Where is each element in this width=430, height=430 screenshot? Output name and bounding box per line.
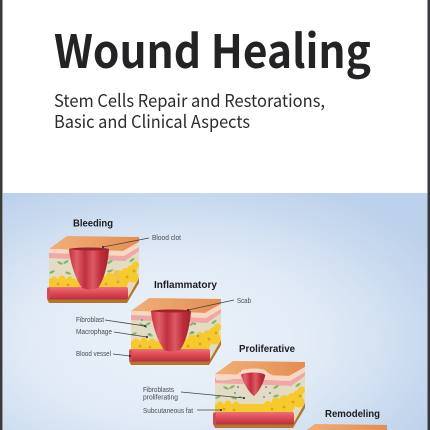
label: Blood vessel: Blood vessel [76,351,111,358]
label: Subcutaneous fat: Subcutaneous fat [143,408,193,415]
label: Macrophage [76,329,148,338]
panel: illustration background [3,193,428,430]
title: Wound Healing [54,16,371,82]
label: Fibroblasts proliferating [143,387,245,402]
label: Fibroblast [76,317,146,327]
subtitle: Basic and Clinical Aspects [54,109,250,134]
heading: Inflammatory: Inflammatory [154,279,217,291]
heading: Bleeding: Bleeding [73,218,113,230]
heading: Proliferative: Proliferative [239,343,295,355]
page edge: right [428,0,430,430]
block: inflammatory [129,298,221,365]
label: Scab: Scab [237,298,251,305]
label: Blood clot: Blood clot [152,235,181,242]
label: Macrophage: Macrophage [76,329,112,336]
label: Blood clot [102,235,181,248]
block: bleeding [47,236,139,303]
label: Fibroblast: Fibroblast [76,317,104,324]
label: Scab [187,298,251,311]
page edge: left [0,0,2,430]
label: Fibroblasts proliferating: Fibroblasts [143,387,174,394]
subtitle [54,88,325,134]
label: Subcutaneous fat [143,408,222,415]
subtitle: Stem Cells Repair and Restorations, [54,88,325,113]
label: Fibroblasts proliferating: proliferating [143,394,178,402]
heading: Remodeling: Remodeling [325,408,380,420]
block: remodeling [297,424,387,430]
block: proliferative [213,361,305,428]
